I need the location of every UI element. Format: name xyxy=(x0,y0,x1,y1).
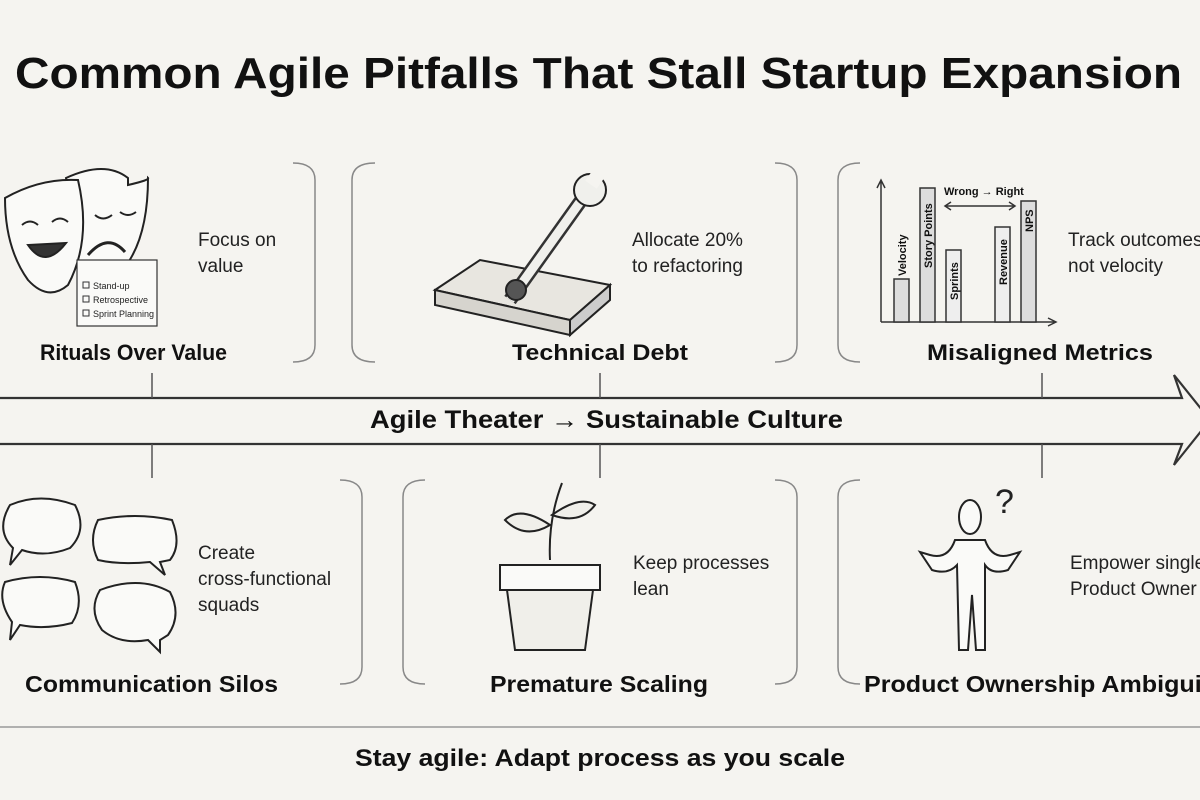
tip text: Keep processes xyxy=(633,553,769,574)
tip text: not velocity xyxy=(1068,256,1164,277)
panel: premature scaling xyxy=(490,483,769,697)
tip text: value xyxy=(198,256,243,277)
panel: communication silos xyxy=(2,498,331,697)
bar chart: Sprints xyxy=(949,262,961,300)
heading: Product Ownership Ambiguity xyxy=(864,671,1200,697)
central arrow: Agile Theater to Sustainable Culture xyxy=(0,375,1200,465)
heading: Premature Scaling xyxy=(490,671,708,697)
icon: wrench on cracked block xyxy=(435,169,610,335)
brackets xyxy=(293,163,860,684)
bar chart xyxy=(877,180,1056,326)
tip text: lean xyxy=(633,579,669,600)
central arrow: Agile Theater to Sustainable Culture: Agile Theater → Sustainable Culture xyxy=(370,406,843,434)
tip text: Product Owner xyxy=(1070,579,1197,600)
tip text: Focus on xyxy=(198,230,276,251)
icon: theater masks xyxy=(5,169,148,292)
tip text: Create xyxy=(198,543,255,564)
footer: Stay agile: Adapt process as you scale xyxy=(355,745,845,772)
icon: speech bubbles xyxy=(2,498,177,652)
icon: confused person xyxy=(920,483,1020,650)
bar chart: Story Points xyxy=(923,203,935,268)
panel: product ownership ambiguity xyxy=(864,483,1200,697)
bar chart: Velocity xyxy=(897,234,909,276)
icon: plant pot xyxy=(500,483,600,650)
connector ticks xyxy=(152,373,1042,478)
tip text: squads xyxy=(198,595,259,616)
tip text: cross-functional xyxy=(198,569,331,590)
checklist: Retrospective xyxy=(93,295,148,305)
heading: Technical Debt xyxy=(512,340,689,365)
bar chart: Wrong → Right xyxy=(944,186,1024,198)
bar chart: Revenue xyxy=(998,239,1010,285)
title: Common Agile Pitfalls That Stall Startup Expansion xyxy=(15,49,1182,98)
panel: rituals over value xyxy=(5,169,276,365)
checklist: Stand-up xyxy=(93,281,130,291)
heading: Rituals Over Value xyxy=(40,340,227,365)
heading: Misaligned Metrics xyxy=(927,340,1153,365)
panel: technical debt xyxy=(435,169,743,365)
heading: Communication Silos xyxy=(25,671,278,697)
panel: misaligned metrics xyxy=(877,180,1200,365)
checklist: Sprint Planning xyxy=(93,309,154,319)
bar chart: NPS xyxy=(1024,209,1036,232)
tip text: Allocate 20% xyxy=(632,230,743,251)
icon: confused person: ? xyxy=(995,483,1014,521)
checklist xyxy=(77,260,157,326)
tip text: to refactoring xyxy=(632,256,743,277)
